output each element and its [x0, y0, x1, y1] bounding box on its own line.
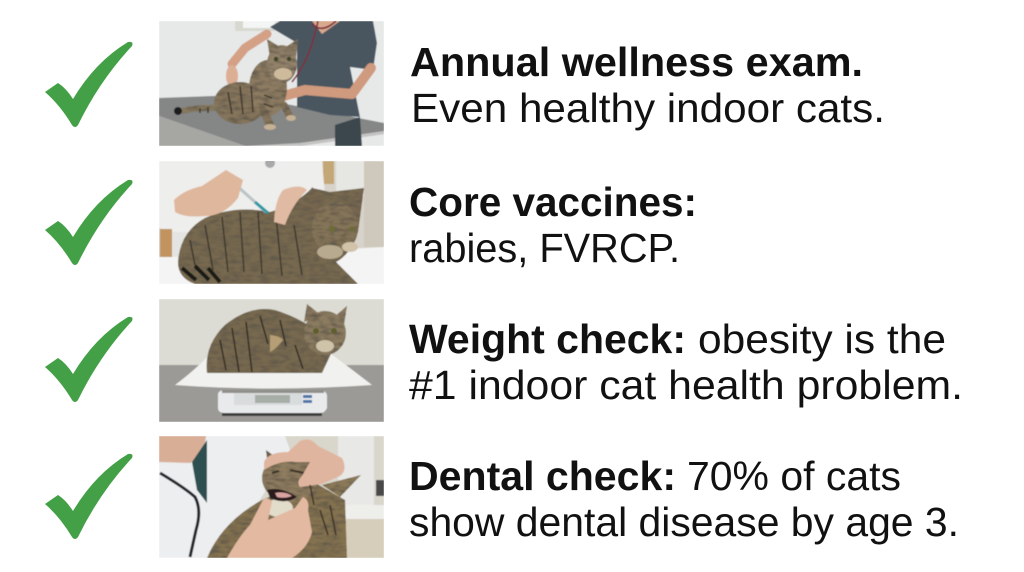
text: annual wellness exam: Even healthy indoor cats. — [411, 85, 885, 131]
row 1: annual wellness exam — [45, 21, 885, 146]
icon: green check mark — [45, 317, 132, 402]
text: dental check — [409, 453, 959, 545]
text: weight check: #1 indoor cat health problem. — [409, 362, 963, 408]
row 3: weight check — [45, 299, 963, 422]
row 4: dental check — [45, 436, 959, 558]
photo: vet examining a tabby cat on a steel table — [159, 21, 384, 146]
row 2: core vaccines — [45, 158, 697, 284]
text: dental check: 70% of cats — [687, 453, 901, 499]
icon: green check mark — [45, 42, 132, 127]
icon: green check mark — [45, 454, 132, 539]
photo: tabby cat sitting on a white digital scale — [159, 299, 384, 422]
icon: green check mark — [45, 180, 132, 265]
photo: vet giving a tabby cat a vaccine injection — [159, 158, 384, 284]
text: weight check: Weight check: — [409, 316, 686, 362]
text: core vaccines: Core vaccines: — [409, 179, 697, 225]
text: annual wellness exam — [410, 39, 885, 131]
text: dental check: show dental disease by age 3. — [409, 499, 959, 545]
text: annual wellness exam: Annual wellness exam. — [410, 39, 863, 85]
text: weight check: obesity is the — [698, 316, 946, 362]
photo: vet checking a cat's teeth — [159, 436, 384, 558]
text: core vaccines — [409, 179, 697, 271]
text: weight check — [409, 316, 963, 408]
text: core vaccines: rabies, FVRCP. — [409, 225, 680, 271]
text: dental check: Dental check: — [409, 453, 676, 499]
